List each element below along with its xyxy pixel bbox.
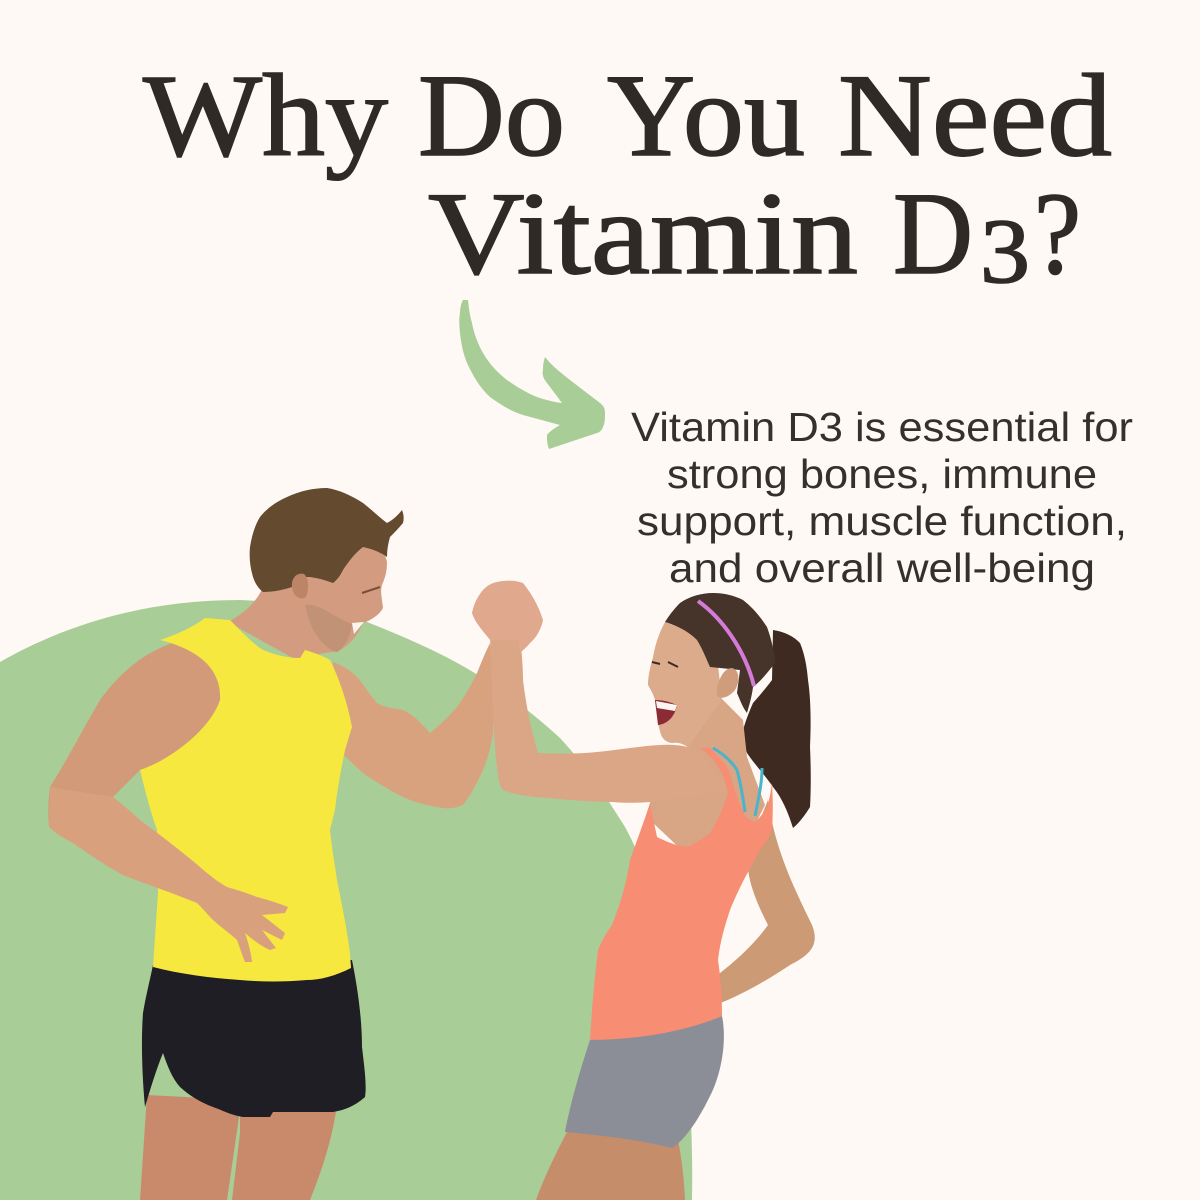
- man ear: [292, 574, 308, 599]
- title: ?: [1034, 168, 1081, 299]
- man smile: [352, 622, 364, 634]
- pink headband: [698, 601, 754, 686]
- woman coral tank top: [590, 748, 773, 1040]
- title: [143, 50, 1112, 302]
- man eye: [362, 587, 380, 593]
- title: Need: [838, 50, 1112, 181]
- title: Do: [418, 50, 565, 181]
- man: [48, 488, 496, 1200]
- green background circle: [0, 600, 692, 1200]
- body text: support, muscle function,: [637, 498, 1127, 544]
- man yellow tank top: [140, 618, 352, 982]
- title: Why: [143, 50, 388, 181]
- title: You: [607, 50, 805, 181]
- woman grey shorts: [565, 1016, 724, 1148]
- man stubble: [305, 605, 352, 652]
- woman face: [648, 622, 722, 747]
- woman ponytail: [743, 630, 811, 828]
- clasped hands: [472, 581, 543, 653]
- title: Vitamin: [428, 168, 858, 299]
- woman ear: [717, 668, 738, 698]
- woman mouth: [655, 700, 677, 725]
- body text: and overall well-being: [669, 545, 1095, 591]
- woman eyes: [652, 662, 678, 667]
- man raised arm: [333, 643, 496, 808]
- teal straps: [713, 748, 762, 816]
- man black shorts: [142, 960, 366, 1117]
- man legs: [140, 1095, 337, 1200]
- woman: [490, 593, 815, 1200]
- woman neck and back: [650, 697, 765, 858]
- man forearm and hand: [49, 787, 288, 962]
- body text: [631, 404, 1133, 591]
- man hair: [250, 488, 404, 592]
- woman back arm: [704, 800, 815, 1008]
- body text: Vitamin D3 is essential for: [631, 404, 1133, 450]
- arrow: [459, 300, 605, 449]
- woman hair: [665, 593, 775, 713]
- man upper arm and side of torso: [48, 638, 225, 827]
- woman legs: [536, 1120, 685, 1200]
- body text: strong bones, immune: [667, 451, 1097, 497]
- woman teeth: [656, 701, 677, 711]
- title: 3: [980, 200, 1030, 302]
- man head and neck: [228, 540, 387, 662]
- woman raised arm: [490, 637, 730, 803]
- title: D: [893, 168, 973, 299]
